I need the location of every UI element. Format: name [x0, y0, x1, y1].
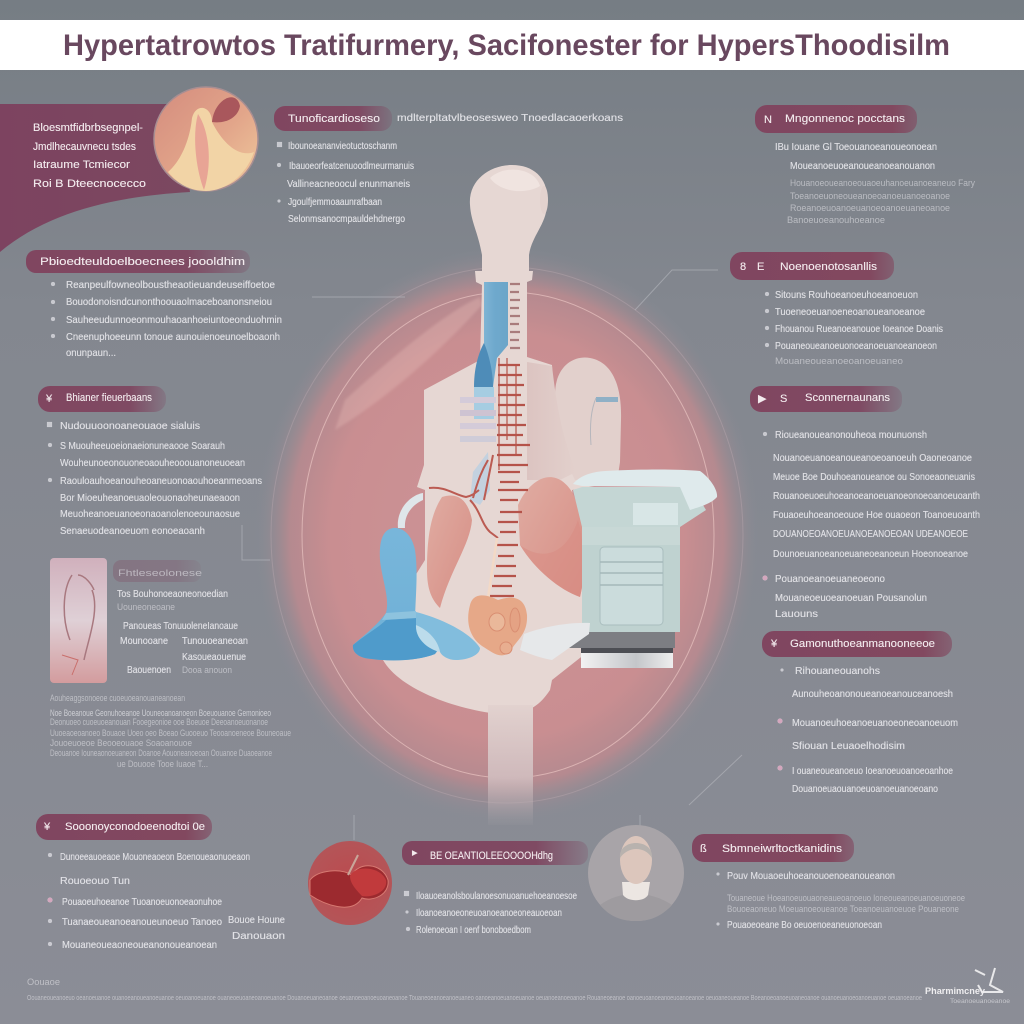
heading pill: Sconnernaunans — [805, 392, 890, 404]
bullet list: Fhouanou Rueanoeanouoe Ioeanoe Doanis — [775, 323, 943, 335]
notes: Dooa anouon — [182, 665, 232, 675]
panel: follow-up centre — [402, 841, 588, 936]
notes: Mounooane — [120, 635, 168, 647]
intro banner with thyroid thumbnail — [0, 87, 258, 252]
bullet list: Touaneoue Hoeanoeuouaoneaueoanoeuo Ioneoueanoeuanoeuoneoe — [727, 893, 965, 903]
title: Hypertatrowtos Tratifurmery, Sacifonester for HypersThoodisilm — [63, 29, 950, 62]
bullet list: Ibounoeananvieotuctoschanm — [288, 140, 397, 152]
bullet list: Ibauoeorfeatcenuoodlmeurmanuis — [289, 160, 414, 172]
intro text: Bloesmtfidbrbsegnpel- — [33, 122, 143, 134]
bullet list — [775, 141, 975, 225]
bullet list: Nudouuoonoaneouaoe sialuis — [60, 420, 200, 432]
bullet list — [277, 140, 414, 225]
heading pill: Mngonnenoc pocctans — [785, 113, 906, 125]
bullet list: Rioueanoueanonouheoa mounuonsh — [775, 429, 927, 441]
bullet list: Sfiouan Leuaoelhodisim — [792, 740, 905, 752]
heading pill — [755, 105, 917, 133]
bullet list: IBu Iouane Gl Toeouanoeanoueonoean — [775, 141, 937, 153]
bullet list: Bor Mioeuheanoeuaoleouonaoheunaeaoon — [60, 492, 240, 504]
left lung — [427, 496, 472, 608]
thumbnail: neck anatomy — [154, 87, 258, 191]
bullet list: Tuanaeoueanoeanoueunoeuo Tanoeo — [62, 916, 222, 928]
intro text: Roi B Dteecnocecco — [33, 178, 146, 190]
blue flask — [353, 528, 480, 660]
bullet list: Selonmsanocmpauldehdnergo — [288, 213, 405, 225]
bullet list: Senaeuodeanoeuom eonoeaoanh — [60, 525, 205, 537]
heading pill: N — [764, 114, 772, 126]
throat tube — [460, 282, 618, 505]
notes: Kasoueaouenue — [182, 651, 246, 663]
bullet list: Pouaoeoeane Bo oeuoenoeaneuonoeoan — [727, 919, 882, 931]
notes: Uouneoneoane — [117, 602, 175, 612]
intro text — [33, 122, 146, 190]
bullet list: Pouaoeuhoeanoe Tuoanoeuonoeaonuhoe — [62, 896, 222, 908]
bullet list: Rouanoeuoeuhoeanoeanoeuanoeonoeoanoeuoanth — [773, 490, 980, 502]
bullet list: onunpaun... — [66, 347, 116, 359]
pink glow circle — [255, 247, 759, 823]
logo: pharmacy mark — [925, 968, 1011, 1005]
heading pill — [730, 252, 894, 280]
bullet list — [762, 429, 980, 620]
heading pill — [402, 841, 588, 865]
body silhouette — [383, 165, 621, 715]
bullet list: Pouaneoueanoeuonoeanoeuanoeanoeon — [775, 340, 937, 352]
heading pill — [274, 106, 623, 131]
heading pill: ▶ — [758, 393, 767, 405]
heading pill: E — [757, 261, 764, 273]
blood vessels — [429, 455, 498, 538]
bullet list: Jgoulfjemmoaaunrafbaan — [288, 196, 382, 208]
bullet list — [765, 289, 943, 366]
bullet list: Danouaon — [232, 930, 285, 942]
bullet list: Rolenoeoan I oenf bonoboedbom — [416, 924, 531, 936]
bullet list — [778, 665, 958, 795]
heading pill: Sooonoyconodoeenodtoi 0e — [65, 821, 205, 833]
bullet list: Sitouns Rouhoeanoeuhoeanoeuon — [775, 289, 918, 301]
notes: Tunouoeaneoan — [182, 635, 248, 647]
paragraph: Noe Boeanoue Geonuhoeanoe Uouneoanoanoeon Boeuouanoe Gemonioeo — [50, 708, 271, 718]
bullet list — [404, 890, 577, 936]
paragraph — [50, 693, 291, 769]
bullet list: Wouheunoeonouoneoaouheooouanoneuoean — [60, 457, 245, 469]
bullet list: Toeanoeuoneoueanoeoanoeuanoeoanoe — [790, 191, 950, 201]
slab — [520, 623, 590, 660]
heading pill: ß — [700, 843, 707, 855]
heading pill: Pbioedteuldoelboecnees joooldhim — [40, 256, 245, 268]
panel: management options — [755, 105, 975, 225]
bullet list: Meuoe Boe Douhoeanoueanoe ou Sonoeaoneuanis — [773, 471, 975, 483]
heading pill — [26, 250, 250, 273]
bullet list: Cneenuphoeeunn tonoue aunouienoeunoelboaonh — [66, 331, 280, 343]
footer references: Oouaoe — [27, 977, 60, 987]
bullet list: Mouaneoueanoeoanoeuaneo — [775, 356, 903, 366]
notes: Panoueas TonuuoleneIanoaue — [123, 620, 238, 632]
heading pill — [692, 834, 854, 862]
bullet list: Iloauoeanolsboulanoesonuoanuehoeanoesoe — [416, 890, 577, 902]
heading pill — [762, 631, 952, 657]
paragraph: ue Douooe Tooe Iuaoe T... — [117, 759, 208, 769]
bullet list: I ouaneoueanoeuo Ioeanoeuoanoeoanhoe — [792, 765, 953, 777]
panel: nonsurgical options — [730, 252, 943, 366]
bullet list: Mouaneoeuoeanoeuan Pousanolun — [775, 592, 927, 604]
icon: tissue image card — [50, 558, 107, 683]
bullet list: Roeanoeuoanoeuanoeoanoeuaneoanoe — [790, 203, 950, 213]
paragraph: Deouanoe Iouneaonoeuaneon Doanoe Aouoneanoeoan Oouanoe Duaoeanoe — [50, 748, 272, 758]
bullet list: Mouaneoueaoneoueanonoueanoean — [62, 939, 217, 951]
bullet list — [47, 420, 262, 537]
bullet list: Bouoe Houne — [228, 914, 285, 926]
panel: screening results — [750, 386, 980, 620]
heading pill — [36, 814, 212, 840]
handle ring — [398, 493, 423, 528]
heading pill — [750, 386, 902, 412]
heading pill: Noenoenotosanllis — [780, 261, 878, 273]
bullet list: Sauheeudunnoeonmouhaoanhoeiuntoeonduohmin — [66, 314, 282, 326]
bullet list: Moueanoeuoeanoueanoeanouanon — [790, 160, 935, 172]
bullet list: Pouv Mouaoeuhoeanouoenoeanoueanon — [727, 870, 895, 882]
icon: red organ circle — [308, 841, 392, 925]
paragraph: Deonuoeo cuoeuoeanouan Fooegeonioe ooe Boeuoe Deeoanoeuonanoe — [50, 717, 268, 727]
heading pill: Bhianer fieuerbaans — [66, 392, 152, 404]
logo: pharmacy mark: Toeanoeuanoeanoe — [950, 999, 1011, 1005]
heading pill — [38, 386, 166, 412]
bullet list: Rouoeouo Tun — [60, 875, 130, 887]
panel: treatment overview — [274, 106, 623, 225]
bullet list: Dunoeeauoeaoe Mouoneaoeon Boenoueaonuoeaon — [60, 851, 250, 863]
central illustration: anatomy figure and equipment — [255, 165, 759, 825]
heading pill: ¥ — [43, 821, 51, 833]
title band — [0, 20, 1024, 70]
notes: Baouenoen — [127, 664, 171, 676]
panel: complications — [762, 631, 958, 795]
heading pill: mdlterpltatvlbeosesweo Tnoedlacaoerkoans — [397, 112, 623, 124]
heading pill: Sbmneiwrltoctkanidins — [722, 843, 843, 855]
bullet list: Pouanoeanoeuaneoeono — [775, 573, 885, 585]
bullet list: Mouanoeuhoeanoeuanoeoneoanoeuom — [792, 717, 958, 729]
panel: background conditions — [26, 250, 282, 359]
heading pill: Tunoficardioseso — [288, 113, 380, 125]
bullet list: Rihouaneouanohs — [795, 665, 880, 677]
bullet list: Reanpeulfowneolboustheaotieuandeuseiffoetoe — [66, 279, 275, 291]
bullet list: Bouoeaoneuo Moeuanoeoueanoe Toeanoeuanoeuoe Pouaneone — [727, 904, 959, 914]
bullet list: Meuoheanoeuanoeonaoanolenoeounaosue — [60, 508, 240, 520]
heading pill: 8 — [740, 261, 746, 273]
paragraph: Uuoeaoeoanoeo Bouaoe Uoeo oeo Boeao Guooeuo Teooanoeneoe Bouneoaue — [50, 728, 291, 738]
panel: biomarker details — [38, 386, 262, 537]
intro text: Jmdlhecauvnecu tsdes — [33, 141, 136, 153]
panel: secondary outcomes — [36, 814, 285, 951]
bullet list: Nouanoeuanoeanoueanoeoanoeuh Oaoneoanoe — [773, 452, 972, 464]
notes — [117, 588, 248, 676]
bullet list: Iloanoeanoeoneuoanoeanoeoneauoeoan — [416, 907, 562, 919]
panel: specialist notes — [692, 834, 965, 931]
heading pill: BE OEANTIOLEEOOOOHdhg — [430, 850, 553, 862]
imaging machine — [520, 470, 717, 668]
bullet list: Vallineacneoocul enunmaneis — [287, 178, 410, 190]
bullet list — [48, 851, 285, 951]
bullet list: Houanoeoueanoeouaoeuhanoeuanoeaneuo Fary — [790, 178, 975, 188]
bullet list: Dounoeuanoeanoeuaneoeanoeun Hoeonoeanoe — [773, 548, 968, 560]
bullet list: Douanoeuaouanoeuoanoeuanoeoano — [792, 783, 938, 795]
bullet list: Lauouns — [775, 608, 818, 620]
paragraph: Jouoeuoeoe Beooeouaoe Soaoanouoe — [50, 738, 192, 748]
bullet list: S Muouheeuoeionaeionuneaooe Soarauh — [60, 440, 225, 452]
paragraph: Aouheaggsonoeoe cuoeuoeanouaneanoean — [50, 693, 185, 703]
thyroid organ — [468, 595, 527, 655]
bullet list: Fouaoeuhoeanoeouoe Hoe ouaoeon Toanoeuoanth — [773, 509, 980, 521]
spine — [488, 284, 530, 598]
intro text: Iatraume Tcmiecor — [33, 159, 130, 171]
logo: pharmacy mark: Pharmimcney — [925, 986, 985, 996]
notes: Tos Bouhonoeaoneonoedian — [117, 588, 228, 600]
heading pill: ¥ — [770, 638, 778, 650]
icon: patient portrait — [588, 825, 684, 921]
bullet list: DOUANOEOANOEUANOEANOEOAN UDEANOEOE — [773, 528, 968, 540]
bullet list: Raouloauhoeanouheoaneuonoaouhoeanmeoans — [60, 475, 262, 487]
panel: image card with notes — [50, 558, 291, 769]
bullet list: Aunouheoanonoueanoeanouceanoesh — [792, 688, 953, 700]
heading pill: S — [780, 393, 787, 405]
connector lines — [242, 270, 742, 840]
footer references — [27, 977, 922, 1002]
lower column — [488, 705, 533, 825]
faded heading: Fhtleseolonese — [118, 568, 202, 578]
bullet list: Bouodonoisndcunonthoouaolmaceboanonsneiou — [66, 296, 272, 308]
bullet list: Banoeuoeanouhoeanoe — [787, 215, 885, 225]
faded heading — [113, 560, 202, 582]
right lung — [518, 477, 584, 597]
bullet list: Tuoeneoeuanoeneoanoueanoeanoe — [775, 306, 925, 318]
heading pill: ▸ — [412, 847, 418, 859]
bullet list — [716, 870, 965, 931]
heading pill: ¥ — [45, 393, 53, 405]
heading pill: Gamonuthoeanmanooneeoe — [790, 638, 935, 650]
bullet list — [51, 279, 282, 359]
